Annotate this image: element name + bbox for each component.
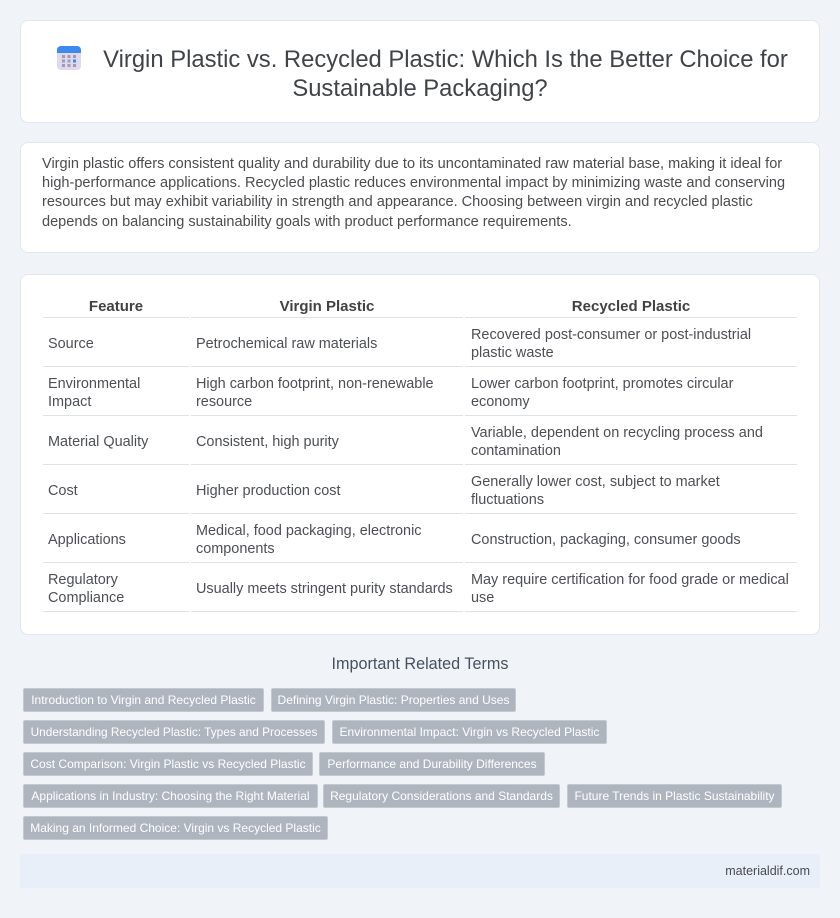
- row: regulatory compliance: Regulatory: [48, 572, 118, 588]
- row: regulatory compliance: May require certification for food grade or medical: [471, 572, 789, 588]
- icon: calendar-style grid: [57, 46, 81, 70]
- title: [103, 46, 788, 102]
- related terms tags: [23, 688, 782, 840]
- row: source: Petrochemical raw materials: [196, 336, 377, 352]
- row: cost: Generally lower cost, subject to market: [471, 474, 720, 490]
- related terms tags: Cost Comparison: Virgin Plastic vs Recycled Plastic: [30, 757, 306, 771]
- table header: Feature: [89, 298, 143, 315]
- table header: [89, 298, 690, 315]
- text block: introduction: Virgin plastic offers consistent quality and durability due to its uncontaminated raw material base, making it ideal for: [42, 156, 782, 172]
- row: applications: Construction, packaging, consumer goods: [471, 532, 741, 548]
- row: applications: Applications: [48, 532, 126, 548]
- row: environmental impact: economy: [471, 394, 530, 410]
- row: applications: [48, 523, 741, 557]
- comparison table: [43, 298, 797, 612]
- title: Sustainable Packaging?: [292, 75, 548, 102]
- related terms tags: Understanding Recycled Plastic: Types and Processes: [31, 725, 317, 739]
- heading: related terms: Important Related Terms: [332, 655, 508, 673]
- row: environmental impact: Impact: [48, 394, 91, 410]
- text block: introduction: resources but may exhibit variability in strength and appearance. Choosing between virgin and recycled plastic: [42, 194, 753, 210]
- row: material quality: Consistent, high purity: [196, 434, 339, 450]
- row: regulatory compliance: Usually meets stringent purity standards: [196, 581, 453, 597]
- row: regulatory compliance: use: [471, 590, 494, 606]
- panel: title card: [20, 20, 820, 123]
- row: environmental impact: High carbon footprint, non-renewable: [196, 376, 434, 392]
- panel: introduction: [20, 142, 820, 253]
- row: material quality: contamination: [471, 443, 561, 459]
- row: source: plastic waste: [471, 345, 554, 361]
- row: cost: Cost: [48, 483, 78, 499]
- row: material quality: [48, 425, 763, 459]
- row: environmental impact: Environmental: [48, 376, 140, 392]
- row: material quality: Variable, dependent on recycling process and: [471, 425, 763, 441]
- row: regulatory compliance: [48, 572, 789, 606]
- row: source: Recovered post-consumer or post-industrial: [471, 327, 751, 343]
- row: applications: Medical, food packaging, electronic: [196, 523, 422, 539]
- row: cost: [48, 474, 720, 508]
- related terms tags: Defining Virgin Plastic: Properties and Uses: [278, 693, 509, 707]
- panel: comparison table: [20, 274, 820, 635]
- related terms tags: Performance and Durability Differences: [327, 757, 537, 771]
- row: environmental impact: resource: [196, 394, 252, 410]
- footer: [20, 854, 820, 888]
- related terms tags: Making an Informed Choice: Virgin vs Recycled Plastic: [30, 821, 321, 835]
- row: cost: fluctuations: [471, 492, 544, 508]
- row: environmental impact: [48, 376, 734, 410]
- row: environmental impact: Lower carbon footprint, promotes circular: [471, 376, 733, 392]
- related terms tags: Applications in Industry: Choosing the Right Material: [31, 789, 310, 803]
- row: material quality: Material Quality: [48, 434, 148, 450]
- text block: introduction: depends on balancing sustainability goals with product performance requirements.: [42, 214, 572, 230]
- row: applications: components: [196, 541, 275, 557]
- row: source: Source: [48, 336, 94, 352]
- title: Virgin Plastic vs. Recycled Plastic: Which Is the Better Choice for: [103, 46, 788, 73]
- related terms tags: Environmental Impact: Virgin vs Recycled Plastic: [340, 725, 599, 739]
- row: source: [48, 327, 751, 361]
- text block: introduction: [42, 156, 785, 230]
- related terms tags: Regulatory Considerations and Standards: [330, 789, 553, 803]
- row: regulatory compliance: Compliance: [48, 590, 124, 606]
- footer source text: materialdif.com: [725, 864, 810, 878]
- related terms tags: Future Trends in Plastic Sustainability: [574, 789, 775, 803]
- text block: introduction: high-performance applications. Recycled plastic reduces environmental impact by minimizing waste and conserving: [42, 175, 785, 191]
- related terms tags: Introduction to Virgin and Recycled Plastic: [31, 693, 256, 707]
- table header: Recycled Plastic: [572, 298, 690, 315]
- row: cost: Higher production cost: [196, 483, 340, 499]
- table header: Virgin Plastic: [280, 298, 374, 315]
